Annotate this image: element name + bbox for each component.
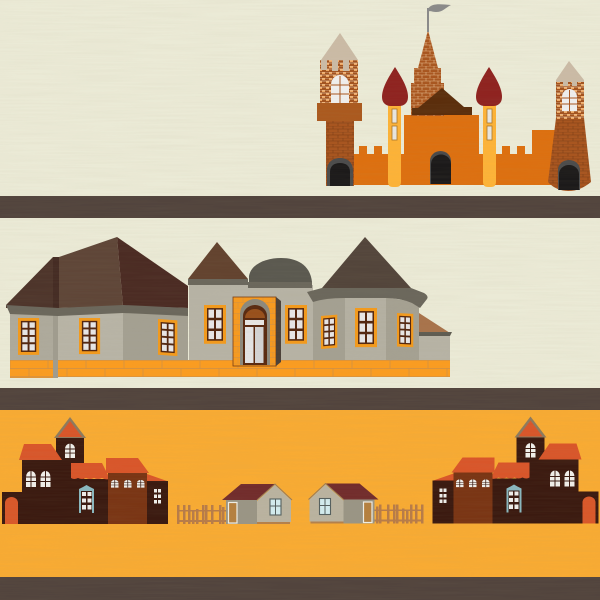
side annex <box>419 313 452 360</box>
orange brick plinth <box>10 360 450 378</box>
windows left wing <box>18 318 177 356</box>
left tower <box>317 33 362 186</box>
tower brim <box>307 288 428 308</box>
windows central wing <box>204 305 307 344</box>
ornate blue window <box>79 485 94 513</box>
flag <box>427 4 451 32</box>
small cottage <box>222 484 292 524</box>
illustration: mirrored right town group <box>308 416 598 524</box>
small dark block <box>147 474 168 524</box>
main hip roof <box>6 237 188 308</box>
gable roof <box>188 242 248 285</box>
tower roof <box>54 417 86 438</box>
dome roof <box>248 258 312 288</box>
illustration: long bungalow house <box>6 237 452 378</box>
divider: top dark band <box>0 196 600 218</box>
brick block <box>106 458 149 524</box>
divider: middle dark band <box>0 388 600 410</box>
arched door <box>5 497 18 524</box>
background: orange bottom band <box>0 410 600 577</box>
entrance portal <box>233 297 281 366</box>
left roof <box>19 444 62 460</box>
illustration: left town group <box>2 417 292 524</box>
left wing walls <box>10 312 188 378</box>
castle curtain walls <box>354 115 556 185</box>
arched windows <box>26 443 75 487</box>
divider: bottom dark band <box>0 577 600 600</box>
background: cream middle band <box>0 218 600 388</box>
central door <box>430 151 451 184</box>
central spire <box>411 4 451 116</box>
middle roof <box>71 463 110 479</box>
round tower walls <box>313 297 419 360</box>
right tower <box>548 61 591 191</box>
conical tower roof <box>322 237 411 288</box>
picket fence <box>177 505 226 524</box>
illustration: castle <box>317 4 591 191</box>
left yellow column <box>382 67 408 187</box>
windows round tower <box>321 308 413 349</box>
background: cream top band <box>0 0 600 196</box>
central gable roof <box>412 88 472 115</box>
central wing wall <box>189 285 313 360</box>
main roof fascia <box>6 305 188 316</box>
right yellow column <box>476 67 502 187</box>
dark manor body <box>2 438 108 524</box>
